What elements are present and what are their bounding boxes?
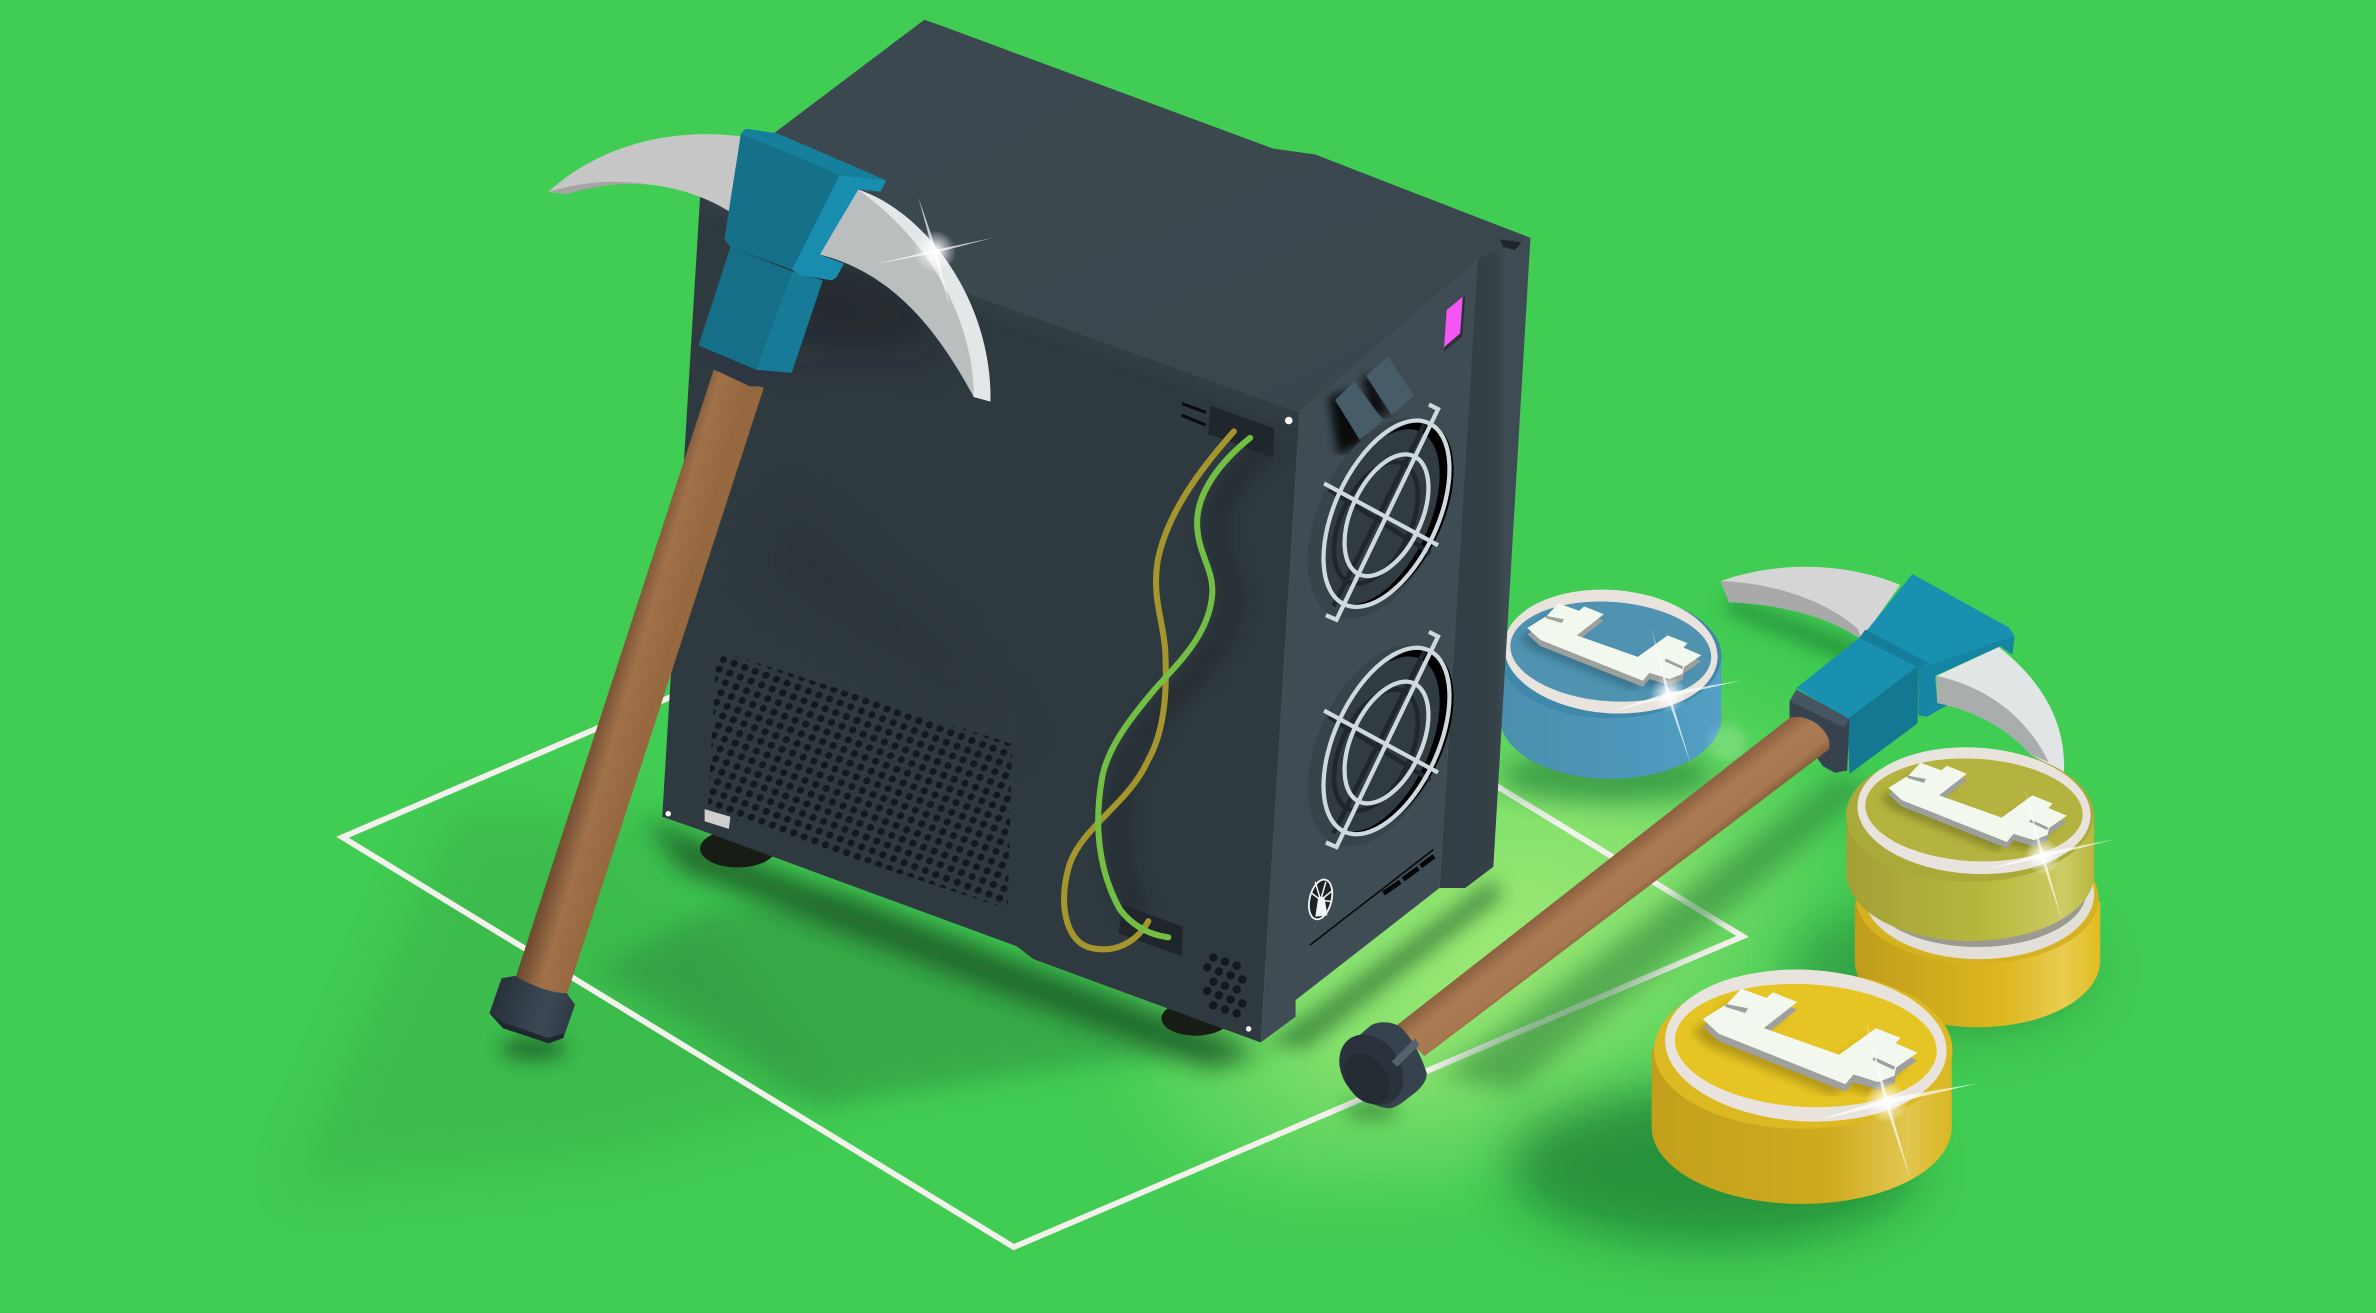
floor outline	[342, 526, 1743, 1247]
miner: right edge strip	[1440, 238, 1530, 888]
miner: slits	[1310, 849, 1434, 945]
miner: top corner notch	[1500, 239, 1521, 250]
miner: left face shading	[802, 268, 1268, 912]
coin: gold, back of stack	[1855, 829, 2100, 1027]
pickaxe cap	[1326, 1022, 1427, 1117]
ground shadows: contact	[500, 594, 1871, 1120]
pickaxe cap	[489, 976, 575, 1043]
sparkle: pickaxe	[877, 197, 993, 308]
miner: vent grille	[708, 650, 1012, 909]
miner: vent flaps	[1329, 357, 1414, 455]
emblem: blue coin	[1519, 603, 1701, 691]
illustration: miner, pickaxes and coins	[308, 20, 2114, 1270]
ground shadows: miner and coins	[288, 803, 2091, 1246]
miner	[662, 20, 1530, 1043]
pickaxe right blade	[820, 189, 990, 402]
miner: top face	[700, 20, 1530, 412]
wire: olive	[1064, 431, 1234, 949]
pickaxe collar	[699, 345, 792, 386]
pickaxe: leaning on miner	[489, 129, 993, 1043]
miner: pink indicator	[1444, 295, 1465, 352]
miner: right face	[1261, 259, 1477, 1043]
miner: label sticker	[705, 809, 730, 829]
pickaxe: lying on ground	[1326, 567, 2064, 1117]
wire: green	[1098, 438, 1250, 937]
pickaxe handle	[1394, 717, 1830, 1056]
fan: lower	[1279, 622, 1479, 869]
pickaxe handle	[511, 370, 764, 1009]
coin: gold, front	[1652, 963, 1977, 1204]
floor glow	[955, 493, 2015, 1313]
pickaxe head	[699, 129, 886, 373]
miner: small vent grille	[1203, 953, 1246, 1018]
miner: bottom port	[1118, 905, 1183, 956]
fan: upper	[1279, 395, 1479, 641]
coin: olive, top of stack	[1846, 741, 2114, 941]
coin glow	[1709, 724, 1746, 761]
emblem: gold coin	[1692, 989, 1918, 1096]
coin: blue	[1500, 583, 1746, 779]
sparkle: gold coin	[1818, 1018, 1977, 1180]
miner: screws	[666, 417, 1293, 1032]
pickaxe right blade	[1937, 647, 2064, 773]
miner: left face	[662, 197, 1300, 1043]
miner: top port	[1181, 404, 1274, 458]
emblem: olive coin	[1880, 763, 2067, 852]
miner: logo	[1305, 877, 1336, 922]
miner: feet	[700, 830, 1230, 1036]
sparkle: olive coin	[1985, 788, 2114, 921]
pickaxe top blade	[1721, 567, 1900, 639]
pickaxe head	[1790, 574, 2015, 774]
sparkle: blue coin	[1609, 629, 1743, 765]
pickaxe left blade	[549, 134, 740, 212]
